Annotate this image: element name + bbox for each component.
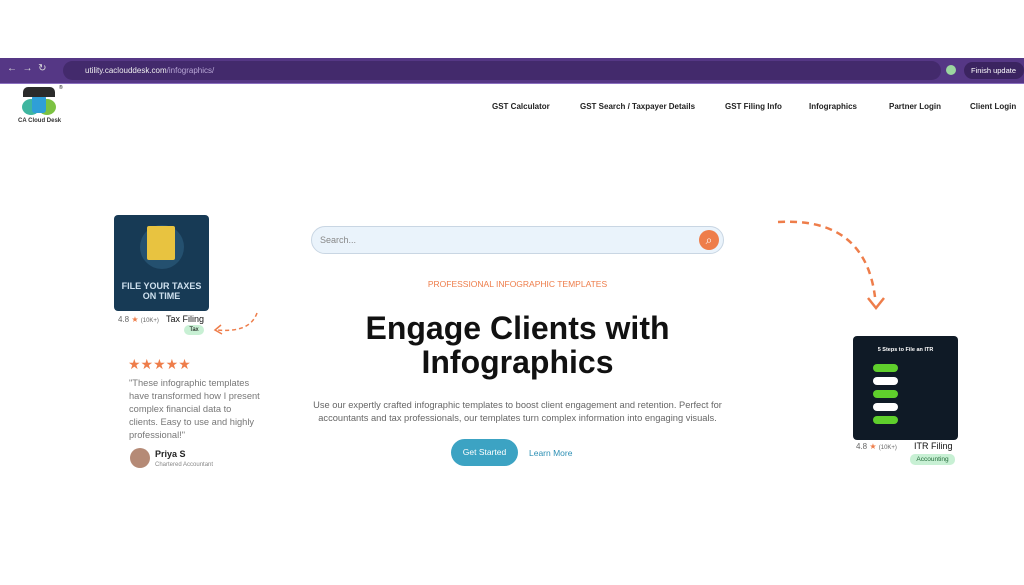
- card: itr filing: [853, 336, 958, 465]
- description: [313, 400, 722, 423]
- subtitle: PROFESSIONAL INFOGRAPHIC TEMPLATES: [428, 279, 607, 289]
- link: learn more: Learn More: [529, 448, 572, 458]
- search bar: [311, 226, 724, 254]
- description: Use our expertly crafted infographic templates to boost client engagement and retention. Perfect for: [313, 400, 722, 410]
- icon: search: ⌕: [706, 233, 712, 247]
- text: GST Calculator: [492, 102, 550, 111]
- logo: [18, 85, 63, 124]
- card: tax filing: Tax Filing: [166, 314, 204, 324]
- nav arrows: ← → ↻: [7, 63, 46, 74]
- button: get started: Get Started: [463, 447, 506, 457]
- text: Client Login: [970, 102, 1016, 111]
- search bar: Search...: [320, 235, 356, 245]
- testimonial: Chartered Accountant: [155, 462, 213, 468]
- description: accountants and tax professionals, our templates turn complex information into engaging visuals.: [318, 413, 717, 423]
- testimonial: Priya S: [155, 449, 186, 459]
- title: Engage Clients with: [365, 310, 670, 346]
- card: itr filing: ITR Filing: [914, 441, 953, 451]
- browser bar: [0, 58, 1024, 84]
- card: itr filing: 4.8 ★ (10K+): [856, 442, 897, 451]
- testimonial: clients. Easy to use and highly: [129, 417, 254, 427]
- url bar: [63, 61, 941, 80]
- testimonial: have transformed how I present: [129, 391, 260, 401]
- text: GST Filing Info: [725, 102, 782, 111]
- logo: CA Cloud Desk: [18, 118, 61, 124]
- arrow: left dashed: [214, 312, 258, 335]
- logo: ®: [59, 85, 63, 91]
- testimonial: "These infographic templates: [129, 378, 249, 388]
- card: tax filing: [114, 215, 209, 335]
- url bar: utility.caclouddesk.com/infographics/: [85, 66, 214, 75]
- nav menu: [492, 102, 1016, 111]
- testimonial: ★★★★★: [128, 356, 191, 372]
- testimonial: [128, 356, 260, 468]
- title: [365, 310, 670, 380]
- finish update: Finish update: [971, 66, 1016, 75]
- icon: search: [699, 230, 719, 250]
- card: itr filing: Accounting: [916, 456, 949, 463]
- card: tax filing: FILE YOUR TAXES: [122, 281, 201, 291]
- text: Infographics: [809, 102, 857, 111]
- title: Infographics: [421, 344, 614, 380]
- text: GST Search / Taxpayer Details: [580, 102, 695, 111]
- finish update: [964, 62, 1024, 79]
- button: get started: [451, 439, 518, 466]
- card: tax filing: ON TIME: [143, 291, 180, 301]
- card: itr filing: 5 Steps to File an ITR: [878, 347, 933, 353]
- card: tax filing: Tax: [189, 327, 199, 333]
- text: Partner Login: [889, 102, 941, 111]
- arrow: right dashed: [778, 220, 885, 310]
- card: tax filing: 4.8 ★ (10K+): [118, 315, 159, 324]
- testimonial: complex financial data to: [129, 404, 231, 414]
- testimonial: professional!": [129, 430, 185, 440]
